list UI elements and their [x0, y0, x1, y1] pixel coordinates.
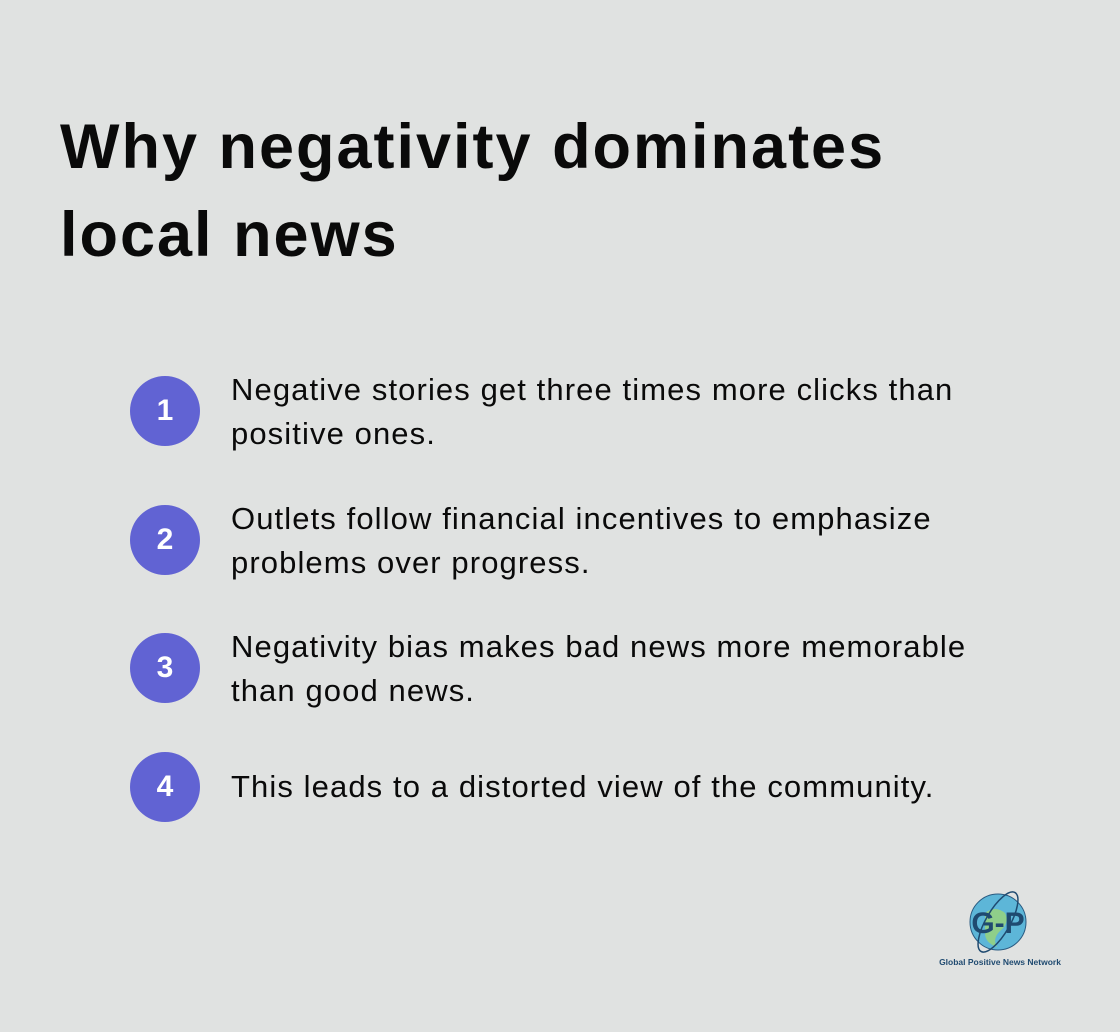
- text 2: problems over progress.: [231, 545, 591, 580]
- item 1: [130, 372, 953, 451]
- number 4: [130, 752, 200, 822]
- number 1: [130, 376, 200, 446]
- text 2: Outlets follow financial incentives to emphasize: [231, 501, 932, 536]
- number 3: 3: [157, 651, 173, 684]
- number 2: 2: [157, 523, 173, 556]
- number 2: [130, 505, 200, 575]
- title: local news: [60, 200, 399, 270]
- number 3: [130, 633, 200, 703]
- logo: G-P: [971, 907, 1025, 940]
- logo: Global Positive News Network: [939, 957, 1061, 967]
- item 4: [130, 752, 935, 822]
- text 3: [231, 629, 966, 708]
- number 1: 1: [157, 394, 173, 427]
- text 1: positive ones.: [231, 416, 436, 451]
- text 3: Negativity bias makes bad news more memorable: [231, 629, 966, 664]
- title: [60, 112, 885, 270]
- text 1: [231, 372, 953, 451]
- text 4: This leads to a distorted view of the community.: [231, 769, 935, 804]
- text 1: Negative stories get three times more clicks than: [231, 372, 953, 407]
- text 3: than good news.: [231, 673, 475, 708]
- number 4: 4: [157, 770, 173, 803]
- item 3: [130, 629, 966, 708]
- title: Why negativity dominates: [60, 112, 885, 182]
- item 2: [130, 501, 932, 580]
- text 2: [231, 501, 932, 580]
- logo: [939, 891, 1061, 967]
